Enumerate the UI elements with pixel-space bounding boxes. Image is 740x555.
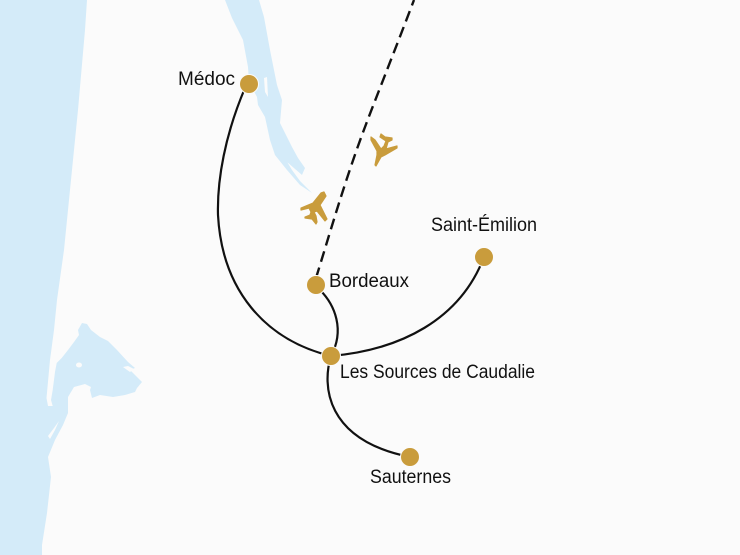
icon: plane landing [301,192,327,224]
basin islands [48,362,134,439]
label: Médoc: Médoc [178,69,235,90]
label: Bordeaux: Bordeaux [329,271,409,292]
label: Les Sources de Caudalie: Les Sources de Caudalie [340,362,535,383]
label: Saint-Émilion: Saint-Émilion [431,215,537,236]
marker: Sauternes [400,448,420,466]
location markers [240,74,494,466]
route: Médoc [218,88,331,356]
estuary island [264,77,268,97]
marker: Médoc [240,74,258,94]
route: Sauternes [328,356,410,457]
routes [218,88,484,457]
marker: Saint-Émilion [474,248,494,266]
ocean and Arcachon basin [0,0,142,555]
label: Sauternes: Sauternes [370,467,451,488]
marker: Bordeaux [306,276,326,294]
route: Saint-Émilion [331,257,484,356]
marker: Les Sources de Caudalie [322,346,340,366]
Gironde estuary [225,0,312,193]
route: Bordeaux [320,290,338,356]
flight path [316,0,414,278]
icon: plane departing [371,134,397,166]
